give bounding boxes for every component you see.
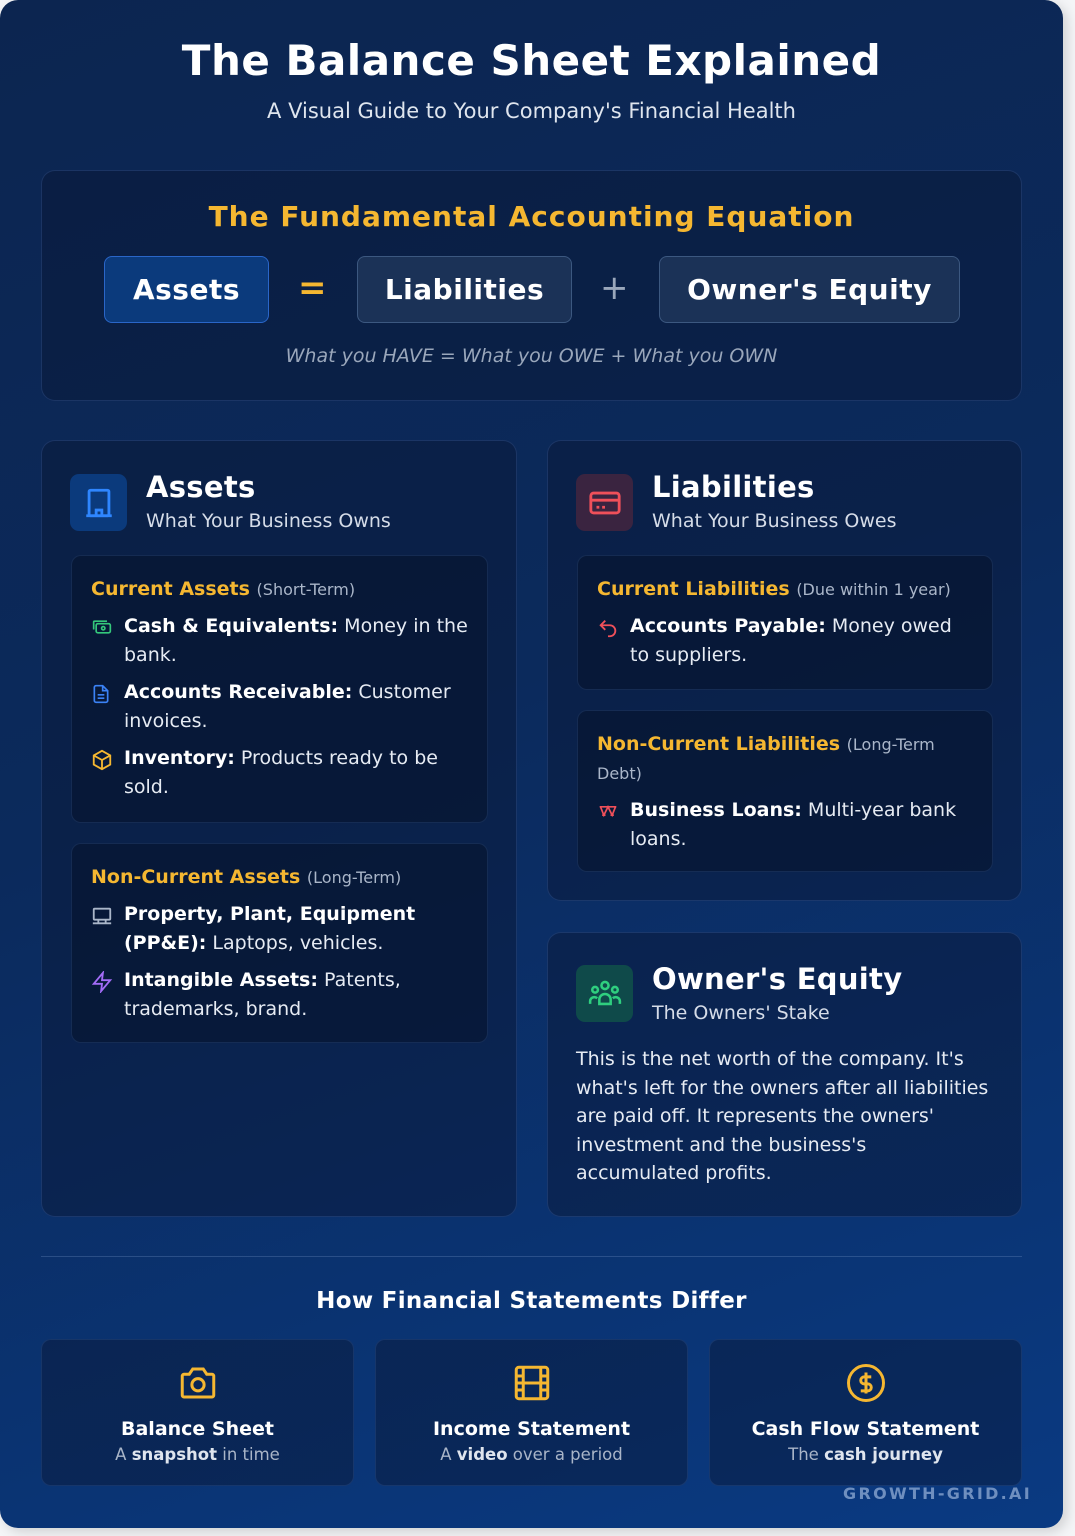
item: receivables: Accounts Receivable: Customer invoices. bbox=[124, 681, 451, 732]
item: PP&E: Property, Plant, Equipment (PP&E): Laptops, vehicles. bbox=[124, 903, 415, 954]
assets subheading: What Your Business Owns bbox=[146, 510, 391, 532]
equity subheading: The Owners' Stake bbox=[652, 1002, 830, 1024]
icon: credit card bbox=[576, 474, 633, 531]
panel: owner's equity bbox=[547, 932, 1022, 1217]
panel: accounting equation bbox=[41, 170, 1022, 401]
equation box: liabilities bbox=[357, 256, 572, 323]
equation heading: The Fundamental Accounting Equation bbox=[209, 200, 854, 233]
equation box: owner's equity bbox=[659, 256, 960, 323]
sub-card: current liabilities: Current Liabilities (Due within 1 year) bbox=[597, 578, 951, 600]
equation box: assets bbox=[104, 256, 269, 323]
item: intangible: Intangible Assets: Patents, trademarks, brand. bbox=[124, 969, 401, 1020]
sub-card: current assets: Current Assets (Short-Term) bbox=[91, 578, 355, 600]
sub-card: current liabilities bbox=[577, 555, 993, 690]
icon: film bbox=[514, 1366, 550, 1400]
card: balance sheet: A snapshot in time bbox=[115, 1445, 280, 1464]
sub-card: non-current assets bbox=[71, 843, 488, 1043]
panel: liabilities bbox=[547, 440, 1022, 901]
icon: dollar coin bbox=[847, 1364, 885, 1402]
equity description: This is the net worth of the company. It's what's left for the owners after all liabilities are paid off. It represents the owners' investment and the business's accumulated profits. bbox=[576, 1048, 988, 1184]
equation box: owner's equity: Owner's Equity bbox=[687, 273, 932, 306]
assets heading: Assets bbox=[146, 470, 256, 504]
title: The Balance Sheet Explained bbox=[182, 36, 881, 85]
subtitle: A Visual Guide to Your Company's Financial Health bbox=[267, 99, 796, 123]
card: balance sheet: Balance Sheet bbox=[121, 1418, 274, 1440]
card: balance sheet bbox=[41, 1339, 354, 1486]
equity heading: Owner's Equity bbox=[652, 962, 902, 996]
card: cash flow: The cash journey bbox=[788, 1445, 943, 1464]
liabilities subheading: What Your Business Owes bbox=[652, 510, 896, 532]
card: income statement: Income Statement bbox=[433, 1418, 630, 1440]
card: income statement bbox=[375, 1339, 688, 1486]
equals sign: = bbox=[298, 268, 326, 308]
icon: people bbox=[576, 965, 633, 1022]
icon: camera bbox=[180, 1368, 216, 1398]
card: cash flow: Cash Flow Statement bbox=[752, 1418, 979, 1440]
plus sign: + bbox=[600, 268, 628, 308]
sub-card: non-current assets: Non-Current Assets (Long-Term) bbox=[91, 866, 401, 888]
card: income statement: A video over a period bbox=[440, 1445, 623, 1464]
watermark: GROWTH-GRID.AI bbox=[843, 1484, 1032, 1503]
section heading: statements: How Financial Statements Differ bbox=[316, 1288, 747, 1314]
item: loans: Business Loans: Multi-year bank loans. bbox=[630, 799, 956, 850]
liabilities heading: Liabilities bbox=[652, 470, 815, 504]
equation caption: What you HAVE = What you OWE + What you OWN bbox=[286, 345, 777, 367]
sub-card: non-current liabilities bbox=[577, 710, 993, 872]
panel: assets bbox=[41, 440, 517, 1217]
item: inventory: Inventory: Products ready to be sold. bbox=[124, 747, 438, 798]
icon: building bbox=[70, 474, 127, 531]
sub-card: current assets bbox=[71, 555, 488, 823]
equation box: assets: Assets bbox=[133, 273, 240, 306]
card: cash flow bbox=[709, 1339, 1022, 1486]
sub-card: non-current liabilities: Non-Current Liabilities (Long-Term Debt) bbox=[597, 733, 935, 783]
item: payables: Accounts Payable: Money owed to suppliers. bbox=[630, 615, 952, 666]
equation box: liabilities: Liabilities bbox=[385, 273, 544, 306]
item: cash: Cash & Equivalents: Money in the bank. bbox=[124, 615, 468, 666]
